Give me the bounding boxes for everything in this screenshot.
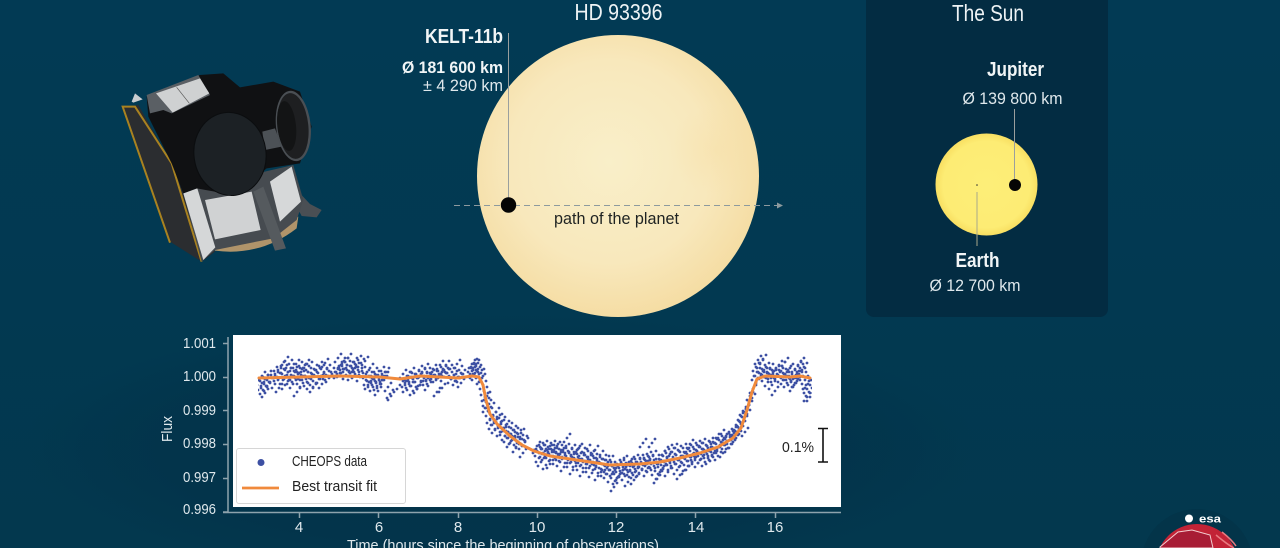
- y axis tick labels: 0.996: [183, 501, 216, 518]
- x axis tick labels: 4: [295, 519, 303, 536]
- y axis tick labels: 0.999: [183, 402, 216, 419]
- star: the Sun disc: [936, 134, 1038, 236]
- legend: CHEOPS data: [292, 453, 368, 470]
- y axis title: Flux: [159, 416, 176, 442]
- label: path of the planet: path of the planet: [554, 209, 679, 228]
- label: Jupiter: Jupiter: [987, 59, 1044, 81]
- label: Earth: Earth: [956, 250, 1000, 272]
- label: Earth: [930, 250, 1020, 295]
- y axis: [223, 337, 228, 512]
- panel: the Sun comparison: [866, 0, 1108, 317]
- legend: Best transit fit: [292, 478, 378, 495]
- y axis tick labels: 1.000: [183, 368, 216, 385]
- y axis tick labels: 1.001: [183, 335, 216, 352]
- heading: The Sun: The Sun: [952, 0, 1024, 26]
- x axis tick labels: 16: [767, 519, 783, 536]
- y axis tick labels: 0.997: [183, 469, 216, 486]
- line: best transit fit: [259, 376, 810, 465]
- arrow: path of the planet: [454, 202, 783, 208]
- scale bar: 0.1%: 0.1%: [782, 439, 814, 456]
- label: Jupiter: Ø 139 800 km: [962, 89, 1062, 108]
- label: KELT-11b name and diameter: ± 4 290 km: [423, 76, 503, 95]
- x axis tick labels: 6: [375, 519, 383, 536]
- x axis: [223, 512, 841, 518]
- icon: CHEOPS satellite: [123, 73, 322, 262]
- leader line: Jupiter: [1014, 109, 1016, 180]
- x axis tick labels: 8: [454, 519, 462, 536]
- chart: CHEOPS light curve: [159, 335, 841, 548]
- badge: ESA logo and CHEOPS mission patch: [1141, 509, 1253, 548]
- scale bar: 0.1%: [782, 428, 828, 462]
- label: KELT-11b name and diameter: [402, 26, 503, 95]
- star: HD 93396 disc: [477, 35, 760, 317]
- plot area: [233, 335, 841, 507]
- y axis tick labels: 0.998: [183, 435, 216, 452]
- data points: CHEOPS data: [257, 354, 813, 491]
- x axis tick labels: [295, 519, 783, 536]
- legend: [236, 448, 406, 504]
- y axis tick labels: [183, 335, 216, 518]
- icon: Jupiter: [1009, 179, 1021, 191]
- leader line: KELT-11b: [508, 33, 510, 200]
- x axis tick labels: 12: [608, 519, 624, 536]
- x axis tick labels: 14: [688, 519, 704, 536]
- icon: Earth: [976, 184, 978, 186]
- label: Earth: Ø 12 700 km: [930, 276, 1020, 295]
- x axis tick labels: 10: [529, 519, 545, 536]
- badge: ESA logo and CHEOPS mission patch: esa: [1199, 514, 1222, 526]
- label: Jupiter: [962, 59, 1062, 108]
- icon: planet KELT-11b: [501, 197, 516, 213]
- label: KELT-11b name and diameter: Ø 181 600 km: [402, 58, 503, 77]
- label: KELT-11b name and diameter: KELT-11b: [425, 26, 503, 48]
- leader line: Earth: [976, 192, 978, 246]
